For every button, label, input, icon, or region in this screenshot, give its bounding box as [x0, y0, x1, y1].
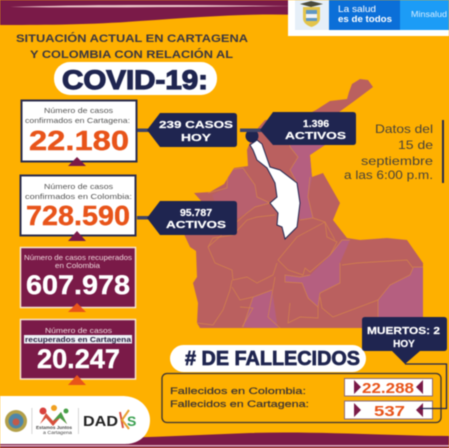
panel: casos confirmados Cartagena: Número de casos — [44, 106, 113, 115]
date note — [344, 120, 444, 183]
logo: Salvamos Juntos a Cartagena — [36, 405, 73, 435]
panel: recuperados Cartagena: Número de casos — [45, 326, 112, 335]
logo: DADIS: DAD — [83, 413, 118, 430]
panel: recuperados Colombia — [20, 248, 136, 312]
panel: fallecidos: Fallecidos en Colombia: — [170, 386, 306, 397]
callout: 95.787 activos: ACTIVOS — [166, 219, 226, 231]
logo: Salvamos Juntos a Cartagena: Estamos Juntos — [36, 425, 73, 430]
callout: 1.396 activos: ACTIVOS — [285, 130, 346, 142]
callout: 239 casos hoy: 239 CASOS — [159, 119, 233, 131]
date note: Datos del — [375, 122, 433, 136]
logo: Ministerio de Salud: Minsalud — [411, 10, 447, 19]
callout: muertos hoy — [362, 317, 447, 408]
value: fallecidos Cartagena — [344, 401, 432, 420]
panel: fallecidos: Fallecidos en Cartagena: — [170, 399, 309, 410]
map highlight: Bolívar department — [246, 130, 300, 239]
logo: Salvamos Juntos a Cartagena: a Cartagena — [43, 430, 73, 435]
panel: recuperados Colombia: Número de casos recuperados — [24, 253, 132, 262]
callout: 1.396 activos: 1.396 — [303, 118, 329, 130]
panel: casos confirmados Cartagena: confirmados en Cartagena: — [25, 116, 130, 125]
panel: fallecidos — [162, 374, 441, 422]
heading: de fallecidos: # DE FALLECIDOS — [185, 348, 360, 370]
heading: COVID-19: COVID-19: — [62, 65, 208, 95]
footer logo strip — [0, 396, 150, 444]
panel: recuperados Colombia: 607.978 — [26, 270, 130, 300]
callout: 1.396 activos — [240, 112, 356, 145]
callout: muertos hoy: HOY — [393, 339, 415, 350]
callout: 239 casos hoy — [137, 113, 237, 147]
map of Colombia — [180, 75, 430, 330]
title — [16, 32, 248, 61]
value: fallecidos Cartagena: 537 — [374, 403, 405, 420]
logo: Cartagena seal — [5, 410, 27, 432]
date note: a las 6:00 p.m. — [344, 168, 433, 182]
top wavy band — [0, 0, 300, 25]
panel: casos confirmados Cartagena: 22.180 — [29, 125, 129, 156]
value: fallecidos Colombia — [344, 378, 432, 397]
panel: casos confirmados Colombia: Número de casos — [44, 182, 113, 191]
title: Y COLOMBIA CON RELACIÓN AL — [30, 48, 233, 61]
panel: recuperados Cartagena: recuperados en Cartagena — [25, 335, 132, 344]
panel: casos confirmados Colombia: 728.590 — [26, 200, 130, 231]
title: SITUACIÓN ACTUAL EN CARTAGENA — [16, 32, 248, 45]
panel: recuperados Colombia: en Colombia — [55, 261, 101, 270]
logo: Ministerio de Salud: La salud — [338, 4, 376, 14]
panel: casos confirmados Colombia: confirmados en Colombia: — [25, 192, 132, 201]
panel: casos confirmados Colombia — [20, 176, 136, 241]
bottom wavy band — [0, 433, 449, 448]
logo: Ministerio de Salud — [288, 0, 449, 36]
callout: 95.787 activos: 95.787 — [180, 207, 212, 219]
callout: 239 casos hoy: HOY — [181, 132, 211, 144]
callout: muertos hoy: MUERTOS: 2 — [367, 326, 441, 337]
callout: 95.787 activos — [137, 201, 237, 235]
date note: 15 de — [398, 138, 433, 152]
value: fallecidos Colombia: 22.288 — [362, 380, 414, 397]
panel: casos confirmados Cartagena — [22, 100, 136, 166]
logo: DADIS — [83, 410, 136, 430]
logo: Ministerio de Salud: es de todos — [338, 14, 392, 24]
panel: recuperados Cartagena: 20.247 — [37, 344, 120, 374]
date note: septiembre — [361, 154, 433, 168]
panel: recuperados Cartagena — [20, 320, 136, 385]
logo: DADIS: S — [127, 413, 136, 429]
